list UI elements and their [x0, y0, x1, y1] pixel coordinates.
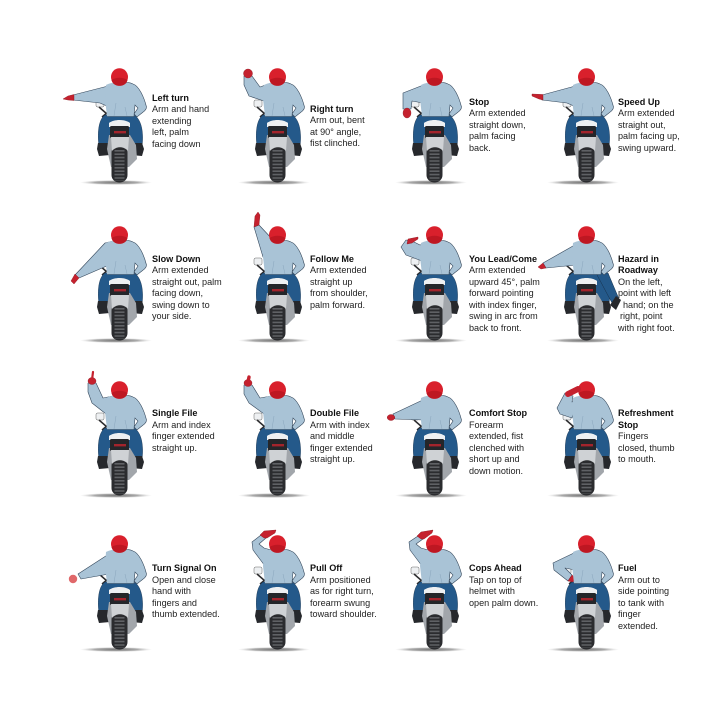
text: you lead / come: You Lead/Come	[469, 254, 537, 264]
text: right turn: Arm out, bent	[310, 115, 365, 125]
text: single file: Arm and index	[152, 420, 211, 430]
text: you lead / come: with index finger,	[468, 300, 537, 310]
text: right turn	[310, 104, 365, 148]
text: speed up: Arm extended	[618, 108, 675, 118]
text: fuel: Arm out to	[618, 575, 660, 585]
text: hazard in roadway: point with left	[618, 288, 672, 298]
text: cops ahead: Cops Ahead	[469, 563, 522, 573]
text: stop: straight down,	[469, 120, 526, 130]
text: follow me: straight up	[310, 277, 352, 287]
rider: stop	[395, 68, 467, 185]
text: speed up: palm facing up,	[618, 131, 680, 141]
text: turn signal on: Turn Signal On	[152, 563, 216, 573]
text: pull off: as for right turn,	[310, 586, 374, 596]
text: hazard in roadway: with right foot.	[617, 323, 675, 333]
text: comfort stop: short up and	[469, 454, 520, 464]
rider: right turn	[238, 68, 310, 185]
text: pull off	[310, 563, 377, 619]
rider: follow me	[238, 212, 310, 343]
text: slow down: Slow Down	[152, 254, 200, 264]
text: speed up	[618, 97, 680, 153]
text: pull off: forearm swung	[310, 598, 370, 608]
text: left turn: Left turn	[152, 93, 189, 103]
text: cops ahead: open palm down.	[469, 598, 538, 608]
text: you lead / come: Arm extended	[469, 265, 526, 275]
text: single file: Single File	[152, 408, 197, 418]
text: follow me: Follow Me	[310, 254, 354, 264]
text: speed up: straight out,	[618, 120, 666, 130]
text: right turn: at 90° angle,	[310, 127, 361, 137]
text: left turn: extending	[152, 116, 191, 126]
rider: refreshment stop	[547, 381, 619, 498]
text: slow down	[152, 254, 222, 321]
text: single file	[152, 408, 215, 453]
text: double file: Double File	[310, 408, 359, 418]
text: hazard in roadway: Hazard in	[618, 254, 659, 264]
text: you lead / come: back to front.	[469, 323, 522, 333]
text: single file: finger extended	[152, 431, 215, 441]
text: stop: back.	[469, 143, 491, 153]
text: cops ahead: Tap on top of	[469, 575, 522, 585]
text: slow down: your side.	[152, 311, 191, 321]
text: turn signal on	[152, 563, 220, 619]
text: you lead / come	[468, 254, 540, 333]
text: right turn: fist clinched.	[310, 138, 360, 148]
text: you lead / come: swing in arc from	[469, 311, 538, 321]
text: pull off: Pull Off	[310, 563, 343, 573]
text: hazard in roadway	[617, 254, 675, 333]
text: fuel: extended.	[618, 621, 658, 631]
text: fuel: to tank with	[618, 598, 664, 608]
text: right turn: Right turn	[310, 104, 353, 114]
text: follow me: palm forward.	[310, 300, 365, 310]
text: turn signal on: fingers and	[152, 598, 197, 608]
text: you lead / come: forward pointing	[469, 288, 534, 298]
text: double file: and middle	[310, 431, 354, 441]
text: turn signal on: Open and close	[152, 575, 216, 585]
text: comfort stop: extended, fist	[469, 431, 524, 441]
text: follow me: from shoulder,	[310, 288, 368, 298]
text: slow down: facing down,	[152, 288, 203, 298]
text: comfort stop: down motion.	[469, 466, 523, 476]
text: speed up: swing upward.	[618, 143, 676, 153]
text: refreshment stop: closed, thumb	[618, 443, 675, 453]
text: hazard in roadway: hand; on the	[623, 300, 674, 310]
text: hazard in roadway: Roadway	[618, 265, 659, 275]
text: comfort stop: Forearm	[469, 420, 503, 430]
text: refreshment stop: Refreshment	[618, 408, 674, 418]
rider: speed up	[532, 68, 619, 185]
rider: pull off	[238, 530, 310, 652]
text: slow down: swing down to	[152, 300, 210, 310]
text: stop: palm facing	[469, 131, 516, 141]
text: turn signal on: thumb extended.	[152, 609, 220, 619]
text: left turn	[152, 93, 209, 149]
rider: hazard in roadway	[538, 226, 621, 343]
text: pull off: toward shoulder.	[310, 609, 377, 619]
text: hazard in roadway: right, point	[620, 311, 663, 321]
text: refreshment stop: Stop	[618, 420, 639, 430]
text: double file: Arm with index	[310, 420, 370, 430]
rider: cops ahead	[395, 530, 467, 652]
text: stop: Stop	[469, 97, 490, 107]
text: fuel: Fuel	[618, 563, 637, 573]
text: single file: straight up.	[152, 443, 197, 453]
rider: you lead / come	[395, 226, 467, 343]
text: slow down: straight out, palm	[152, 277, 222, 287]
text: double file: finger extended	[310, 443, 373, 453]
text: fuel: finger	[618, 609, 641, 619]
rider: fuel	[547, 535, 619, 652]
text: follow me: Arm extended	[310, 265, 367, 275]
text: left turn: left, palm	[152, 127, 189, 137]
text: double file: straight up.	[310, 454, 355, 464]
text: stop: Arm extended	[469, 108, 526, 118]
rider: single file	[80, 372, 152, 498]
text: refreshment stop: Fingers	[618, 431, 649, 441]
text: cops ahead: helmet with	[469, 586, 515, 596]
text: speed up: Speed Up	[618, 97, 660, 107]
rider: double file	[238, 377, 310, 498]
text: slow down: Arm extended	[152, 265, 209, 275]
rider: comfort stop	[387, 381, 467, 498]
text: left turn: Arm and hand	[152, 104, 209, 114]
text: follow me	[310, 254, 368, 310]
text: refreshment stop	[618, 408, 675, 464]
text: pull off: Arm positioned	[310, 575, 371, 585]
text: cops ahead	[469, 563, 538, 608]
text: fuel: side pointing	[618, 586, 669, 596]
text: left turn: facing down	[152, 139, 201, 149]
rider: slow down	[71, 226, 152, 343]
text: comfort stop: clenched with	[469, 443, 524, 453]
rider: turn signal on	[69, 535, 152, 652]
text: hazard in roadway: On the left,	[618, 277, 662, 287]
text: turn signal on: hand with	[152, 586, 191, 596]
text: fuel	[618, 563, 669, 631]
text: comfort stop: Comfort Stop	[469, 408, 528, 418]
text: refreshment stop: to mouth.	[618, 454, 656, 464]
text: stop	[469, 97, 526, 153]
rider: left turn	[63, 68, 152, 185]
text: comfort stop	[469, 408, 528, 476]
text: you lead / come: upward 45°, palm	[469, 277, 540, 287]
text: double file	[310, 408, 373, 464]
